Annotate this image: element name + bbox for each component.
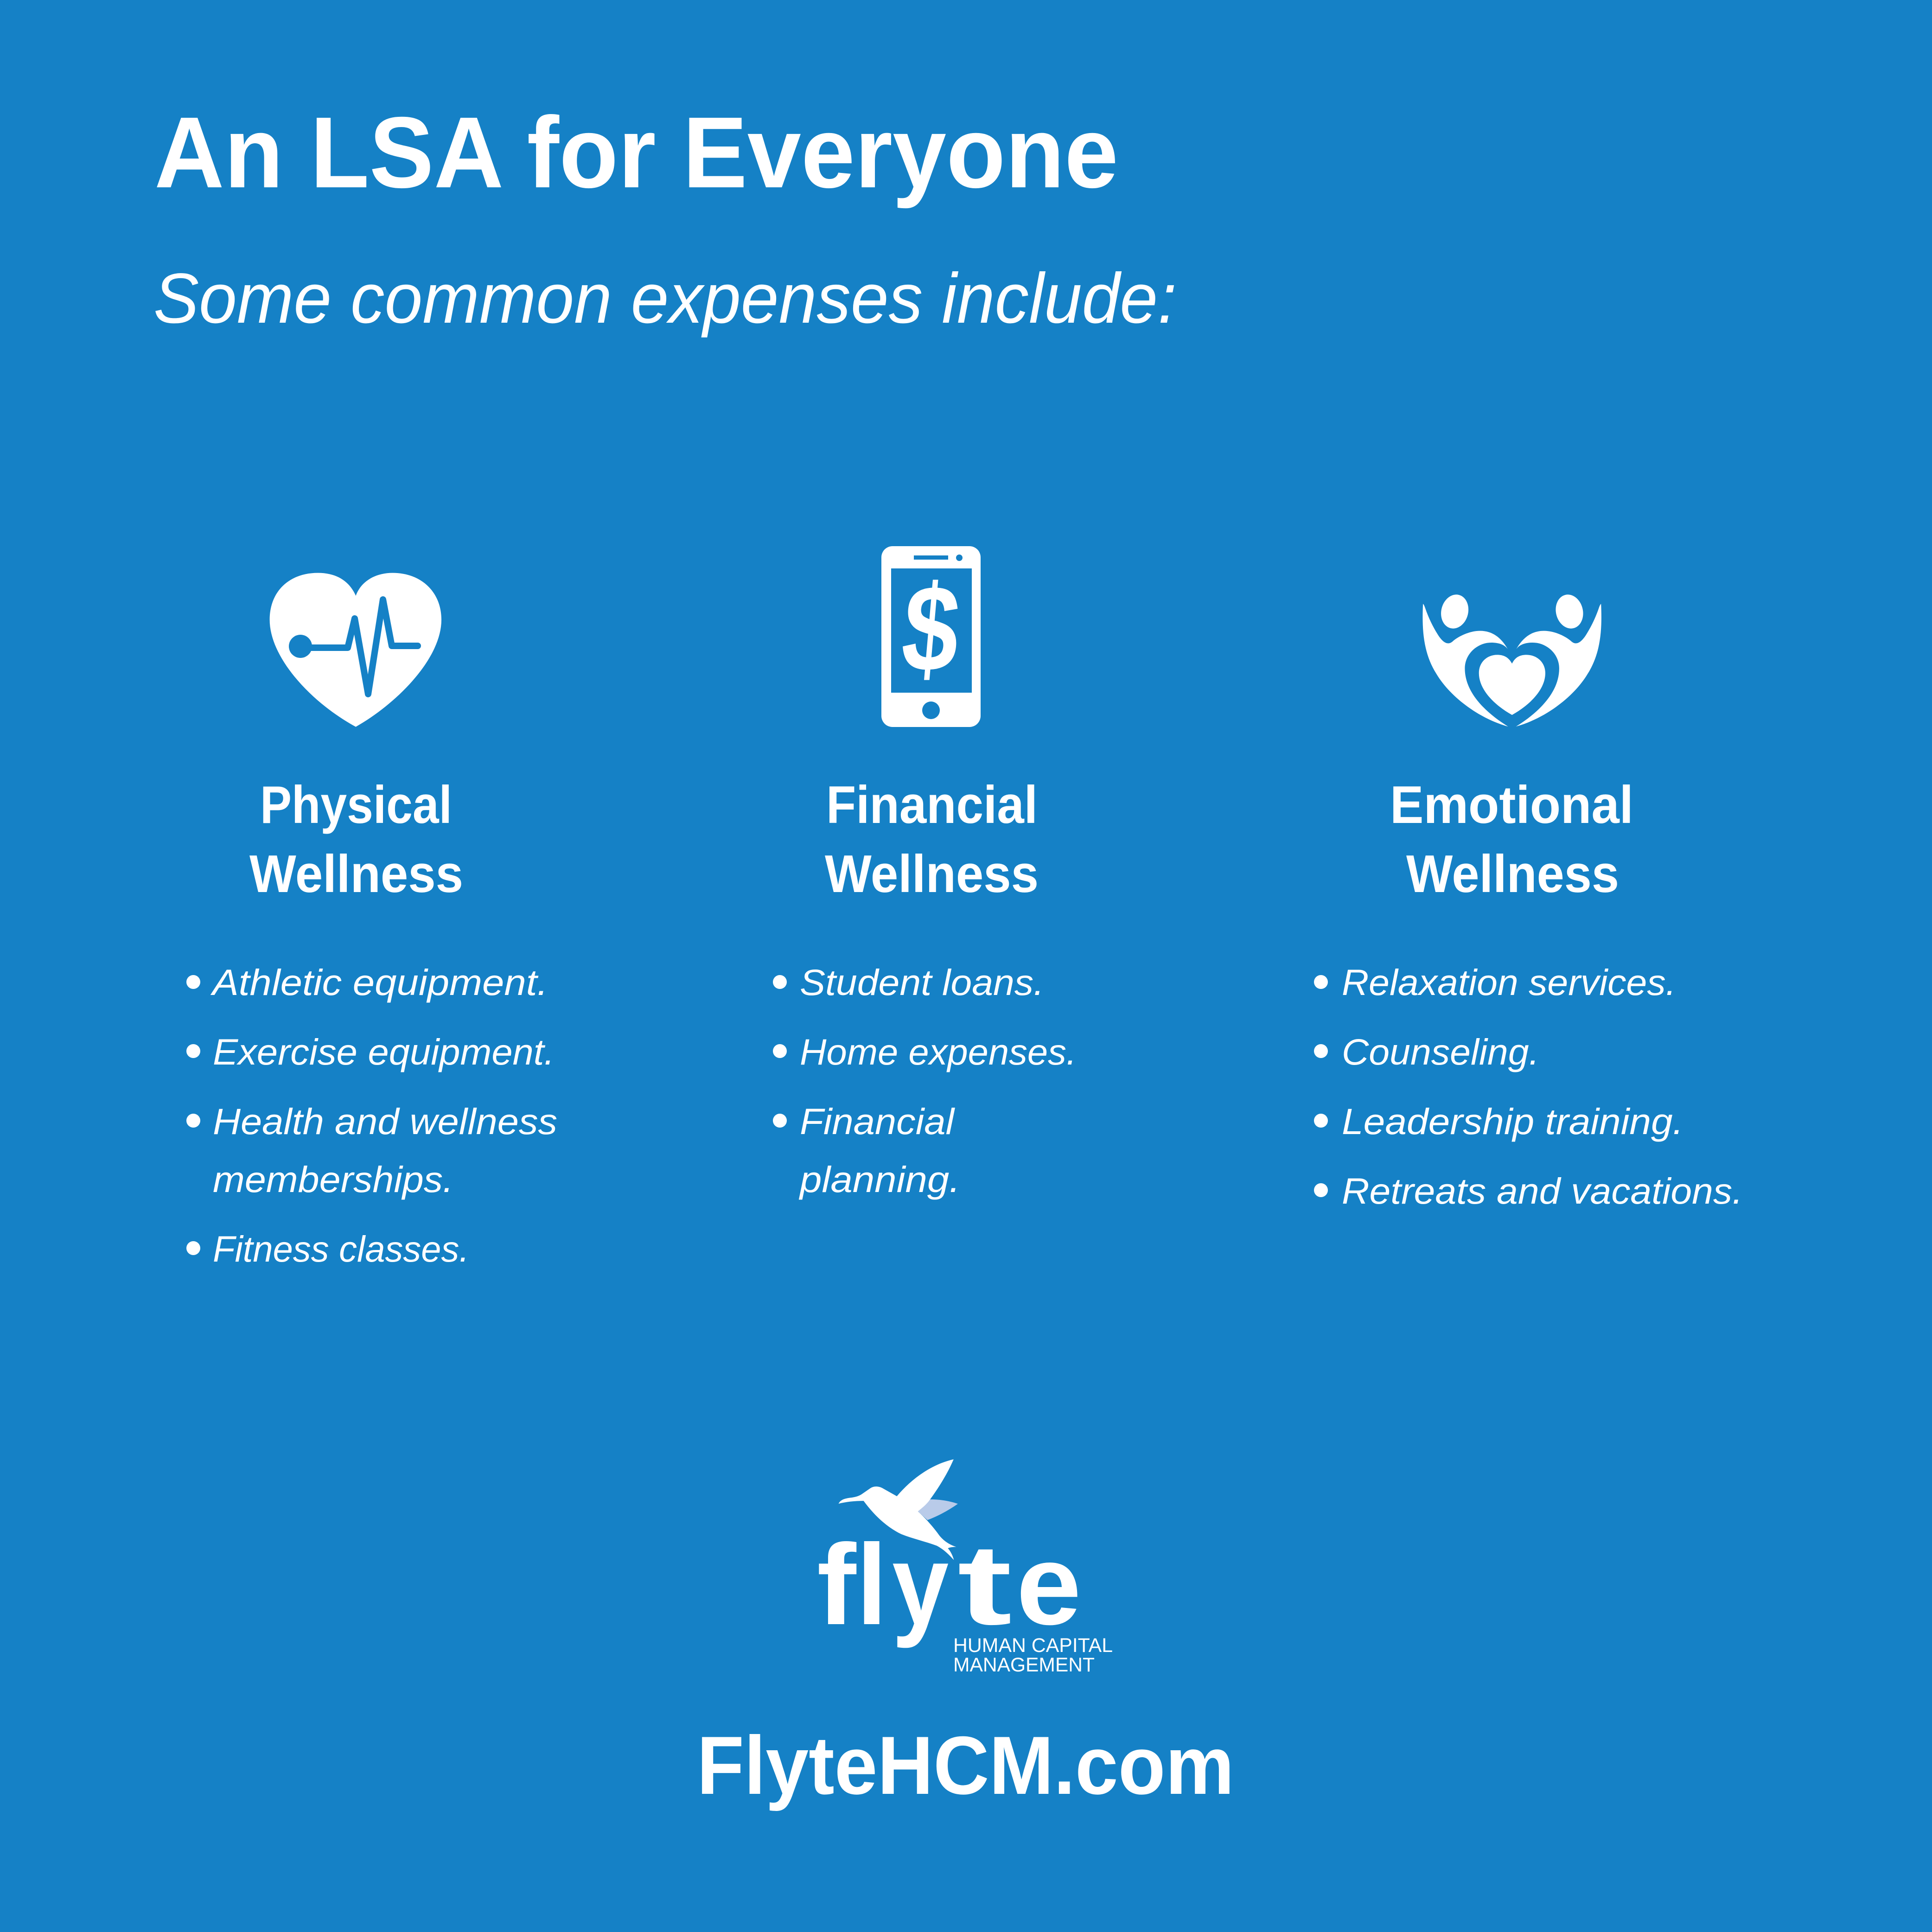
list: emotional wellness expenses: Relaxation services. [1342,962,1676,1003]
heading: Physical Wellness: Wellness [249,845,463,904]
logo tagline: MANAGEMENT [953,1654,1095,1676]
heading: Financial Wellness: Wellness [825,845,1039,904]
list: physical wellness expenses: memberships. [213,1159,453,1200]
list: physical wellness expenses: Health and wellness [213,1101,557,1142]
list: financial wellness expenses: Home expenses. [800,1031,1077,1072]
website url: FlyteHCM.com [697,1719,1234,1811]
list: emotional wellness expenses: Retreats and vacations. [1342,1170,1743,1211]
list: physical wellness expenses [186,962,557,1269]
logo: flyte human capital management [817,1459,1113,1676]
logo wordmark: y [892,1520,949,1649]
list: physical wellness expenses: Athletic equipment. [210,962,548,1003]
list: physical wellness expenses: Exercise equipment. [213,1031,555,1072]
heading: Financial Wellness: Financial [826,776,1038,835]
logo tagline [953,1634,1113,1676]
list: physical wellness expenses: Fitness classes. [213,1228,469,1269]
panel: emotional wellness [1314,592,1743,1211]
list: financial wellness expenses: planning. [799,1159,960,1200]
icon: hummingbird [839,1459,958,1560]
heading: Physical Wellness [249,776,463,904]
heading: Emotional Wellness: Wellness [1406,845,1619,904]
list: emotional wellness expenses: Leadership training. [1342,1101,1683,1142]
title: An LSA for Everyone [154,96,1118,209]
icon: heart with heartbeat line [270,573,441,727]
logo wordmark: f [817,1521,856,1649]
list: financial wellness expenses: Student loans. [800,962,1044,1003]
panel: physical wellness [186,573,557,1269]
icon: two people embracing a heart [1422,592,1601,727]
icon: smartphone with dollar sign: $ [897,560,965,697]
logo wordmark [817,1520,1081,1649]
list: emotional wellness expenses [1314,962,1743,1211]
heading: Emotional Wellness: Emotional [1390,776,1633,835]
logo wordmark: e [1016,1520,1081,1648]
list: financial wellness expenses [773,962,1077,1200]
icon: smartphone with dollar sign [881,546,981,727]
panel: financial wellness [773,546,1077,1200]
list: financial wellness expenses: Financial [800,1101,956,1142]
logo wordmark: t [957,1520,1012,1649]
heading: Physical Wellness: Physical [260,776,452,835]
list: emotional wellness expenses: Counseling. [1342,1031,1539,1072]
subtitle: Some common expenses include: [153,259,1177,338]
heading: Financial Wellness [825,776,1039,904]
logo tagline: HUMAN CAPITAL [953,1634,1113,1657]
logo wordmark: l [856,1521,887,1649]
heading: Emotional Wellness [1390,776,1633,904]
